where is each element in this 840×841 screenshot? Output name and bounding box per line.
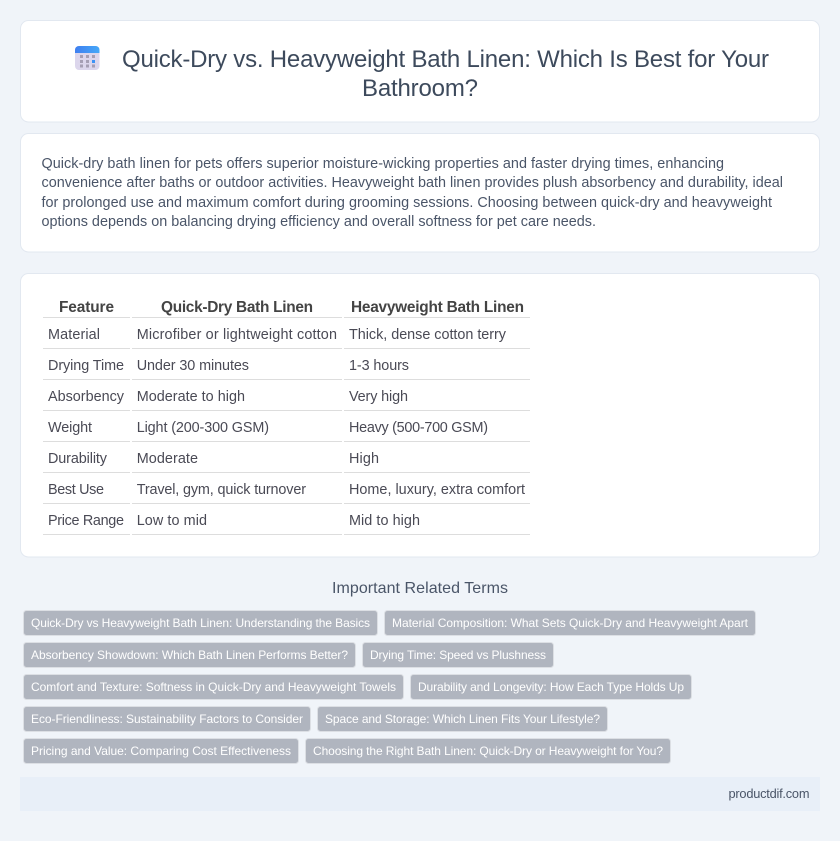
- footer: [20, 777, 820, 811]
- tag: [306, 738, 670, 764]
- row: best use: Home, luxury, extra comfort: [349, 482, 525, 498]
- row: drying time: 1-3 hours: [349, 358, 409, 374]
- tag: Quick-Dry vs Heavyweight Bath Linen: Understanding the Basics: [31, 616, 370, 630]
- tag: Eco-Friendliness: Sustainability Factors to Consider: [31, 712, 303, 726]
- tag: [410, 674, 692, 700]
- row: durability: Moderate: [137, 451, 198, 467]
- footer: productdif.com: [728, 786, 810, 801]
- table header: Quick-Dry Bath Linen: [161, 299, 313, 316]
- tag: [24, 738, 298, 764]
- row: best use: Best Use: [48, 482, 104, 498]
- tag: [24, 642, 356, 668]
- row: durability: Durability: [48, 451, 108, 467]
- row: drying time: Under 30 minutes: [137, 358, 249, 374]
- title: [122, 46, 769, 102]
- row: material: Material: [48, 327, 100, 343]
- row: absorbency: [48, 389, 408, 405]
- row: absorbency: Absorbency: [48, 389, 125, 405]
- tag: [362, 642, 554, 668]
- title: Quick-Dry vs. Heavyweight Bath Linen: Which Is Best for Your: [122, 46, 769, 73]
- heading: important related terms: Important Related Terms: [332, 580, 508, 597]
- tags: related terms: [24, 610, 756, 764]
- row: weight: [48, 420, 488, 436]
- tag: Choosing the Right Bath Linen: Quick-Dry or Heavyweight for You?: [313, 744, 663, 758]
- tag: Space and Storage: Which Linen Fits Your Lifestyle?: [325, 712, 600, 726]
- row: material: Microfiber or lightweight cotton: [137, 327, 337, 343]
- row: weight: Light (200-300 GSM): [137, 420, 269, 436]
- row: durability: High: [349, 451, 379, 467]
- text block: intro: [42, 156, 783, 230]
- row: durability: [48, 451, 379, 467]
- row: price range: Mid to high: [349, 513, 420, 529]
- table header: Heavyweight Bath Linen: [351, 299, 524, 316]
- tag: [24, 706, 310, 732]
- icon: calendar grid: [75, 46, 100, 70]
- row: absorbency: Very high: [349, 389, 408, 405]
- row: drying time: Drying Time: [48, 358, 124, 374]
- tag: Material Composition: What Sets Quick-Dry and Heavyweight Apart: [392, 616, 749, 630]
- panel: intro paragraph: [20, 134, 820, 252]
- tag: Absorbency Showdown: Which Bath Linen Performs Better?: [31, 648, 348, 662]
- row: material: [48, 327, 507, 343]
- row: price range: Low to mid: [137, 513, 207, 529]
- text block: intro: convenience after baths or outdoor activities. Heavyweight bath linen provides plush absorbency and durability, ideal: [42, 175, 783, 191]
- tag: Drying Time: Speed vs Plushness: [370, 648, 546, 662]
- tag: [384, 610, 756, 636]
- text block: intro: for prolonged use and maximum comfort during grooming sessions. Choosing between quick-dry and heavyweight: [42, 195, 772, 211]
- tag: Durability and Longevity: How Each Type Holds Up: [418, 680, 684, 694]
- row: weight: Weight: [48, 420, 92, 436]
- text block: intro: Quick-dry bath linen for pets offers superior moisture-wicking properties and faster drying times, enhancing: [42, 156, 724, 172]
- row: best use: [48, 482, 525, 498]
- row: price range: Price Range: [48, 513, 124, 529]
- row: best use: Travel, gym, quick turnover: [137, 482, 306, 498]
- tag: [24, 610, 378, 636]
- table header: [59, 299, 524, 316]
- tag: [24, 674, 404, 700]
- row: weight: Heavy (500-700 GSM): [349, 420, 488, 436]
- row: price range: [48, 513, 420, 529]
- tag: Pricing and Value: Comparing Cost Effectiveness: [31, 744, 291, 758]
- panel: comparison table: [20, 274, 820, 557]
- row: drying time: [48, 358, 409, 374]
- tag: Comfort and Texture: Softness in Quick-Dry and Heavyweight Towels: [31, 680, 396, 694]
- title: Bathroom?: [362, 75, 478, 102]
- row: absorbency: Moderate to high: [137, 389, 245, 405]
- table header: Feature: [59, 299, 114, 316]
- panel: header: [20, 20, 820, 122]
- tag: [318, 706, 608, 732]
- text block: intro: options depends on balancing drying efficiency and overall softness for pet care needs.: [42, 214, 596, 230]
- row: material: Thick, dense cotton terry: [349, 327, 507, 343]
